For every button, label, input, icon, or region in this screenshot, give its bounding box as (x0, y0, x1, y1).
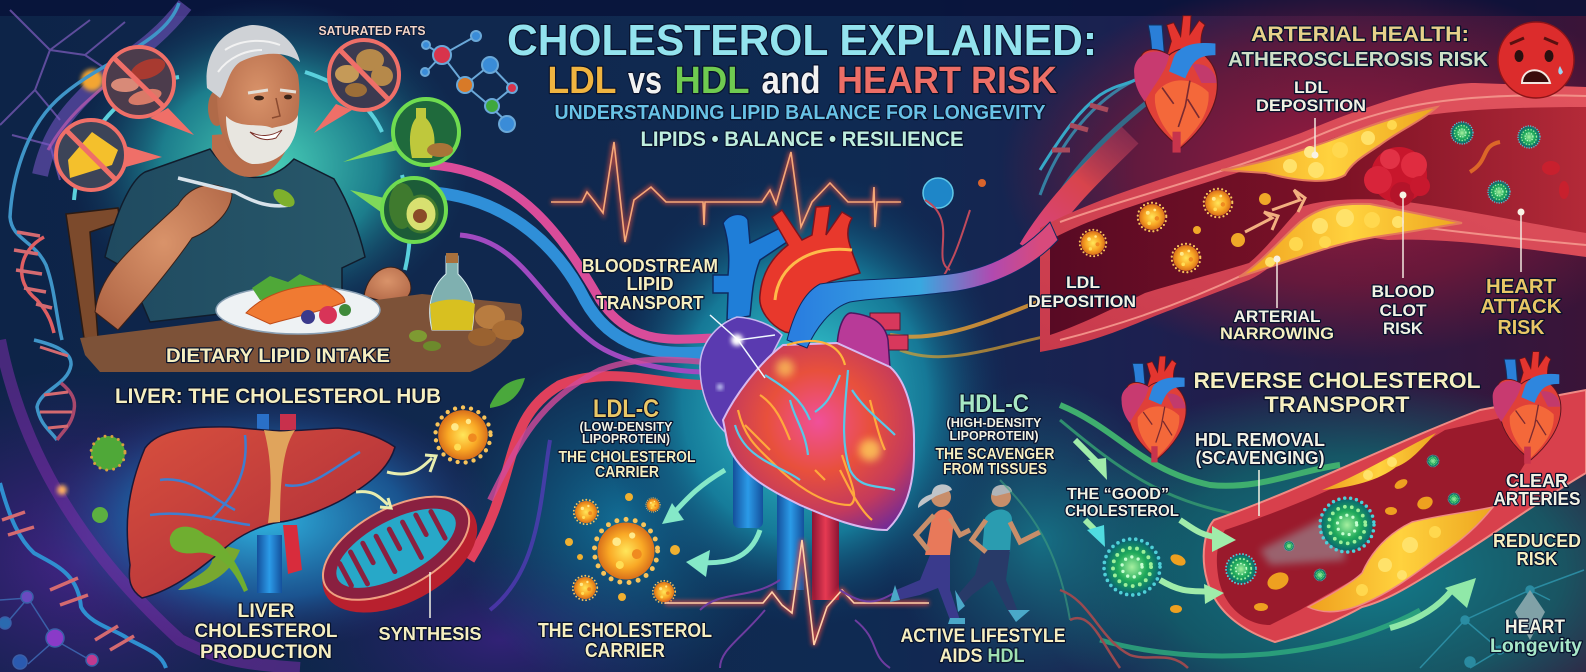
left chamber glass (700, 317, 782, 432)
dietary lipid intake label: DIETARY LIPID INTAKE (166, 346, 390, 367)
HDL and red cells in lumen (1451, 122, 1569, 203)
HDL-C panel: THE SCAVENGER (936, 446, 1055, 463)
lower plaque (1239, 204, 1462, 277)
arterial health heading (1228, 23, 1489, 71)
liver organ (127, 414, 395, 598)
sad face icon (1498, 22, 1574, 98)
reverse cholesterol heart left (1121, 356, 1186, 462)
right flow ribbons (890, 100, 1150, 357)
woman runner (890, 484, 970, 624)
liver production label (194, 601, 338, 663)
HDL removal label (1195, 430, 1325, 516)
title line 2: HEART RISK (837, 60, 1058, 102)
fork and food (178, 178, 298, 211)
LDL deposition top label: DEPOSITION (1256, 96, 1366, 115)
LDL-C panel: (LOW-DENSITY (580, 419, 673, 434)
bottom carrier label (538, 620, 712, 662)
heart attack risk label: RISK (1498, 317, 1545, 339)
heart attack risk label: ATTACK (1480, 296, 1562, 318)
ECG bottom (665, 540, 929, 645)
heart attack risk label: HEART (1486, 276, 1556, 298)
HDL-C panel: FROM TISSUES (943, 461, 1047, 478)
DNA helix left (10, 3, 179, 440)
neural network lines top-left (0, 10, 125, 180)
purple cell strand (40, 5, 185, 175)
LDL deposition top label: LDL (1294, 78, 1328, 97)
wall highlights (1060, 95, 1586, 340)
aorta (760, 206, 860, 335)
arrows to LDL particle (662, 470, 760, 577)
heart attack risk label (1480, 208, 1562, 339)
subtitle: UNDERSTANDING LIPID BALANCE FOR LONGEVITY (554, 102, 1046, 124)
HDL removal label: (SCAVENGING) (1196, 448, 1325, 468)
LDL deposition left label (1028, 273, 1136, 311)
vena cava (713, 214, 788, 320)
chair (66, 208, 120, 338)
liver production label: PRODUCTION (200, 642, 332, 663)
atherosclerosis risk: ATHEROSCLEROSIS RISK (1228, 49, 1489, 71)
liver hub heading: LIVER: THE CHOLESTEROL HUB (115, 385, 441, 408)
LDL-C panel: THE CHOLESTEROL (558, 449, 696, 466)
heart body (723, 343, 914, 530)
good cholesterol label: CHOLESTEROL (1065, 503, 1179, 520)
LDL particles in lumen (1080, 189, 1305, 272)
reduced risk label: REDUCED (1493, 531, 1581, 551)
HDL-C panel: HDL-C (959, 390, 1029, 418)
title line 2: LDL (548, 60, 616, 102)
reverse heading: TRANSPORT (1264, 392, 1410, 417)
LDL-C panel: LIPOPROTEIN) (582, 431, 670, 446)
synthesis label: SYNTHESIS (378, 624, 482, 644)
DNA helix bottom center-right (1060, 590, 1188, 668)
icon: olive oil (343, 99, 459, 165)
tagline: LIPIDS • BALANCE • RESILIENCE (640, 128, 964, 151)
HDL particle and green arrows (1075, 440, 1476, 628)
man eating healthy meal (66, 25, 411, 338)
lower vessel branches (700, 580, 900, 668)
arterial health heading: ARTERIAL HEALTH: (1251, 23, 1469, 46)
DNA helix lower left (0, 483, 166, 668)
saturated fats label: SATURATED FATS (318, 23, 426, 38)
liver production label: CHOLESTEROL (194, 621, 338, 642)
blood clot risk label: CLOT (1380, 301, 1427, 320)
sparkle (710, 315, 775, 390)
artery wall (1040, 83, 1586, 352)
clear arteries label (1494, 471, 1580, 509)
bloodstream lipid transport label (582, 256, 718, 313)
molecule (421, 31, 517, 132)
teal arc around man (74, 72, 410, 270)
liver side particles and arrows (91, 378, 525, 523)
upper plaque (1221, 107, 1437, 181)
bloodstream lipid transport label: BLOODSTREAM (582, 256, 718, 276)
title: CHOLESTEROL EXPLAINED: (507, 16, 1097, 65)
longevity network (1420, 570, 1584, 668)
LDL particle cluster (565, 493, 680, 603)
neck (212, 130, 286, 177)
right mini heart (1493, 352, 1561, 464)
synthesis label (378, 572, 482, 644)
molecule lower left (0, 591, 98, 669)
arterial narrowing label (1220, 256, 1334, 343)
right atrium and stubs (837, 313, 908, 368)
cleaned HDL particles (1226, 455, 1460, 611)
lumen (1050, 107, 1586, 335)
lumen (1217, 405, 1560, 625)
runners (890, 484, 1040, 624)
active lifestyle label: ACTIVE LIFESTYLE (900, 626, 1066, 647)
icon: avocado (350, 178, 446, 242)
man runner (955, 485, 1040, 622)
LDL-C panel (558, 395, 696, 481)
clear arteries label: CLEAR (1506, 471, 1568, 491)
good cholesterol label (1065, 486, 1179, 520)
ECG top (551, 142, 901, 242)
right hand (364, 267, 411, 302)
bottom carrier label: THE CHOLESTEROL (538, 620, 712, 642)
title line 2: vs (628, 60, 662, 102)
title (507, 16, 1097, 151)
head (207, 25, 300, 164)
healthy artery (1204, 390, 1586, 642)
atherosclerotic artery (1040, 83, 1586, 352)
blood clot (1364, 147, 1430, 206)
active lifestyle label: AIDS HDL (940, 646, 1025, 667)
icon: no cheese (56, 120, 162, 190)
HDL-C panel: LIPOPROTEIN) (950, 428, 1038, 443)
LDL-C panel: CARRIER (595, 464, 659, 481)
table (80, 294, 522, 372)
reduced risk label (1493, 531, 1581, 569)
icon: no saturated nuts (314, 40, 399, 133)
shirt (105, 149, 365, 322)
LDL deposition left label: LDL (1066, 273, 1100, 292)
arm with fork (95, 185, 232, 330)
good cholesterol label: THE “GOOD” (1067, 486, 1169, 503)
artery wall outer (1204, 390, 1586, 642)
heart longevity label: HEART (1505, 617, 1565, 638)
HDL removal label: HDL REMOVAL (1195, 430, 1325, 450)
blood clot risk label: RISK (1383, 319, 1424, 338)
LDL deposition top label (1256, 78, 1366, 158)
title line 2: and (762, 60, 820, 102)
HDL-C panel: (HIGH-DENSITY (946, 415, 1042, 430)
salmon plate (216, 274, 380, 334)
purple arc lower left (0, 340, 300, 668)
pulmonary artery ribbon (787, 222, 1058, 348)
reverse heading (1194, 368, 1480, 417)
arterial narrowing label: ARTERIAL (1234, 307, 1320, 326)
reverse heading: REVERSE CHOLESTEROL (1194, 368, 1480, 393)
DNA helix upper right (1040, 80, 1135, 195)
blue orb (923, 178, 986, 290)
blood flow ribbons left (425, 165, 712, 610)
icon: no meat (104, 47, 194, 135)
LDL deposition left label: DEPOSITION (1028, 292, 1136, 311)
bottom carrier label: CARRIER (585, 640, 665, 662)
heart longevity label: Longevity (1490, 636, 1582, 657)
mitochondrion (303, 473, 496, 636)
title line 2 (548, 60, 1058, 102)
lower plaque (1308, 507, 1493, 612)
clear arteries label: ARTERIES (1494, 489, 1580, 509)
bloodstream lipid transport label: TRANSPORT (596, 293, 704, 313)
coronary vessels (735, 341, 895, 520)
blood clot risk label (1372, 192, 1434, 338)
arterial narrowing label: NARROWING (1220, 324, 1334, 343)
LDL-C panel: LDL-C (593, 395, 659, 423)
olive oil and walnuts (409, 253, 524, 351)
upper plaque (1322, 433, 1436, 490)
blood clot risk label: BLOOD (1372, 282, 1434, 301)
liver production label: LIVER (238, 601, 295, 622)
lower vessels (733, 450, 839, 600)
green flow ribbons lower right (1000, 405, 1420, 656)
small heart arterial (1134, 16, 1217, 153)
title line 2: HDL (674, 60, 750, 102)
bloodstream lipid transport label: LIPID (626, 274, 674, 294)
active lifestyle label (900, 626, 1066, 667)
HDL-C panel (936, 390, 1055, 478)
reduced risk label: RISK (1516, 549, 1558, 569)
heart longevity label (1490, 617, 1582, 657)
central heart (700, 206, 1058, 600)
